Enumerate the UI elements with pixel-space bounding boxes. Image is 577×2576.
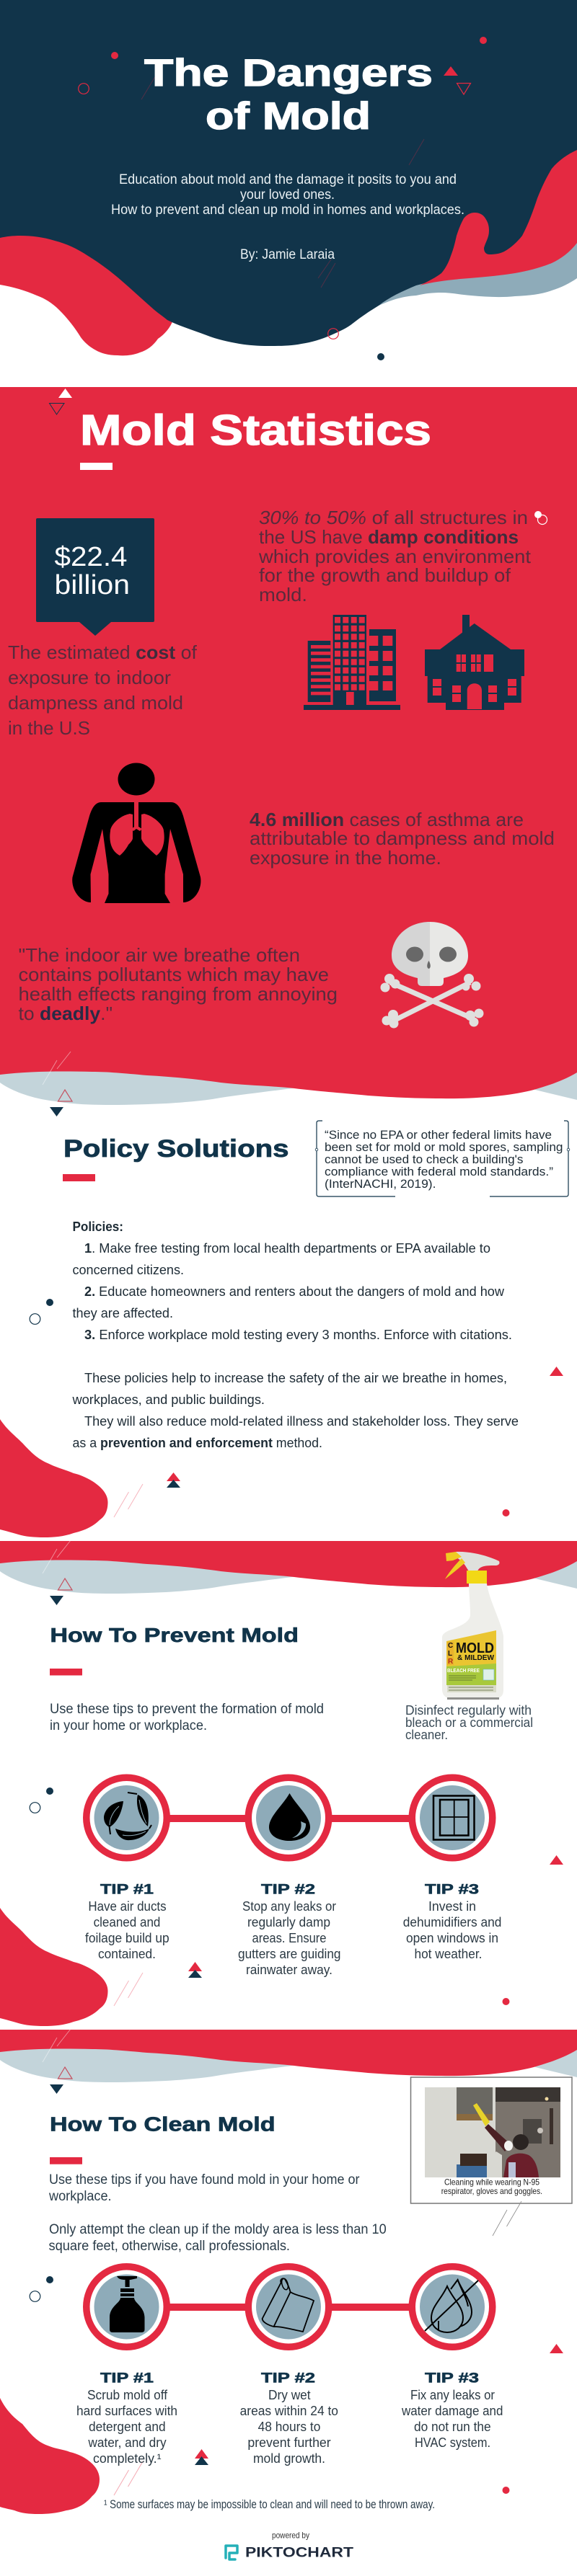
callout: $22.4 billion: $22.4 [55,542,127,572]
subtitle: your loved ones. [240,187,335,203]
heading bar [50,2157,82,2164]
text: policies: 3. Enforce workplace mold testing every 3 months. Enforce with citations. [84,1328,512,1342]
tip 1 text: Scrub mold off [87,2388,168,2402]
tip 3 text [403,1883,501,1961]
panel: how to prevent mold [0,1540,577,2026]
text: asthma: exposure in the home. [250,847,441,869]
text: policies: 2. Educate homeowners and renters about the dangers of mold and how [84,1284,505,1299]
image: photo of person cleaning mold: Cleaning while wearing N-95 [444,2177,539,2188]
tip 1 badge with soap [83,2263,170,2350]
text: intro [48,2172,387,2254]
tip 3 badge with window [408,1775,496,1861]
text: cost: exposure to indoor [8,667,171,688]
callout: quote box: been set for mold or mold spores, sampling [325,1140,563,1154]
tip 2 text: gutters are guiding [238,1947,340,1961]
text: quote: to deadly." [19,1003,113,1024]
tip 1 text: detergent and [89,2420,166,2434]
image: mold cleaner spray bottle: MOLD [456,1640,494,1656]
piktochart wordmark: PIKTOCHART [245,2546,353,2561]
decorative triangles [49,388,72,414]
subtitle: Education about mold and the damage it posits to you and [119,172,457,187]
text: quote: health effects ranging from annoying [19,983,338,1005]
image: photo of person cleaning mold: respirator, gloves and goggles. [441,2186,542,2196]
text: disinfect caption: Disinfect regularly with [405,1703,532,1718]
decorative shapes [30,1787,563,2006]
text: cost: in the U.S [8,717,90,739]
text: intro: Only attempt the clean up if the moldy area is less than 10 [49,2222,387,2237]
tip 1 text: TIP #1 [100,2371,154,2386]
heading: mold statistics: Mold Statistics [80,407,431,454]
title: The Dangers [144,52,433,94]
decorative marks [43,1052,72,1116]
text: policies [71,1220,519,1450]
panel: how to clean mold [0,2029,577,2514]
tip 1 text: water, and dry [87,2435,167,2450]
footnote: ¹ Some surfaces may be impossible to clean and will need to be thrown away. [104,2497,435,2511]
tip 1 text: foilage build up [85,1931,169,1945]
tip 3 text: water damage and [401,2404,503,2418]
text: disinfect caption [405,1703,533,1742]
decorative dot and ring [534,511,547,525]
heading bar [50,1669,82,1675]
image: mold cleaner spray bottle [442,1552,503,1700]
tips timeline [76,2263,503,2466]
tip 2 badge with towel [245,2263,332,2350]
subtitle: How to prevent and clean up mold in homes and workplaces. [111,203,464,218]
text: intro: Use these tips to prevent the formation of mold [50,1702,324,1717]
image: mold cleaner spray bottle: & MILDEW [457,1654,495,1662]
tip 1 text: completely.¹ [93,2451,162,2466]
tip 1 text: cleaned and [94,1915,160,1929]
text: damp conditions [258,507,532,605]
tip 3 text: TIP #3 [425,2371,479,2386]
text: cost: The estimated cost of [8,641,198,663]
tip 2 text [238,1883,340,1977]
tip 2 text: areas within 24 to [240,2404,338,2418]
heading: how to prevent mold: How To Prevent Mold [50,1624,299,1646]
tip 2 text: TIP #2 [261,1883,315,1897]
callout: quote box: “Since no EPA or other federal limits have [325,1128,552,1142]
text: intro: square feet, otherwise, call professionals. [49,2239,290,2254]
tip 2 text: 48 hours to [258,2420,320,2434]
image: mold cleaner spray bottle: C [448,1642,453,1650]
text: disinfect caption: bleach or a commercial [405,1715,533,1730]
tip 3 text [401,2371,503,2450]
wave: top band [0,2030,577,2082]
tip 2 badge with drop [245,1775,332,1861]
text: asthma: attributable to dampness and mold [250,827,555,849]
panel: policy solutions [0,1121,570,1537]
tip 3 text: open windows in [406,1931,498,1945]
decorative marks [43,1540,72,1605]
author: By: Jamie Laraia [240,247,335,262]
text: intro: Use these tips if you have found mold in your home or [49,2172,360,2188]
heading: policy solutions: Policy Solutions [63,1135,288,1163]
text: damp conditions: for the growth and buildup of [259,564,511,586]
blob: red left [0,2398,100,2514]
tip 1 text: contained. [98,1947,156,1961]
text: damp conditions: which provides an environment [258,546,532,567]
text: damp conditions: the US have damp conditions [259,526,519,548]
text: policies: 1. Make free testing from local health departments or EPA available to [84,1241,490,1256]
panel: header [0,0,577,360]
title [144,52,433,138]
tip 3 text: TIP #3 [425,1883,479,1897]
header blob: red left [0,231,173,355]
decorative marks [43,2029,72,2094]
tip 3 text: HVAC system. [415,2435,490,2450]
tip 3 text: dehumidifiers and [403,1915,501,1929]
tip 2 text: regularly damp [247,1915,330,1929]
text: policies: they are affected. [72,1306,173,1320]
tip 3 text: Fix any leaks or [410,2388,495,2402]
tip 1 text [76,2371,177,2466]
text: asthma: 4.6 million cases of asthma are [250,809,524,830]
subtitle [111,172,464,218]
tip 2 text: mold growth. [253,2451,325,2466]
tip 2 text: rainwater away. [246,1963,332,1977]
tip 2 text: areas. Ensure [252,1931,326,1945]
text: cost: dampness and mold [8,692,183,714]
heading bar [63,1174,95,1181]
tip 2 text: TIP #2 [261,2371,315,2386]
tip 2 text: Dry wet [268,2388,311,2402]
text: intro: in your home or workplace. [50,1718,207,1733]
heading bar [80,463,113,470]
image: mold cleaner spray bottle: BLEACH FREE [447,1669,480,1674]
text: damp conditions: 30% to 50% of all structures in [259,507,528,528]
text: policies: workplaces, and public buildings. [71,1393,265,1407]
tip 2 text: prevent further [247,2435,331,2450]
connector [166,1815,411,1822]
callout: $22.4 billion [36,518,154,636]
callout: $22.4 billion: billion [55,570,130,600]
tip 3 text: do not run the [414,2420,491,2434]
tip 2 text [240,2371,338,2466]
decorative shapes [30,1299,563,1517]
wave: stats bottom [0,1052,577,1105]
tip 2 text: Stop any leaks or [242,1899,336,1914]
callout: quote box: cannot be used to check a building's [325,1152,524,1166]
callout: quote box: compliance with federal mold standards.” [325,1165,553,1178]
footer: powered by piktochart [226,2531,353,2561]
panel: mold statistics [0,387,577,1116]
text: cost [8,641,198,739]
callout: quote box [315,1121,570,1196]
blob: red left [0,1908,108,2026]
text: intro: workplace. [48,2189,112,2204]
text: policies: These policies help to increase the safety of the air we breathe in homes, [84,1371,507,1385]
tip 3 badge with crossed-out drops [408,2263,496,2350]
tip 1 text: TIP #1 [100,1883,154,1897]
text: quote: contains pollutants which may have [19,964,329,985]
text: asthma [250,809,555,869]
tips timeline [83,1775,501,1977]
title: of Mold [206,95,371,138]
image: mold cleaner spray bottle: R [448,1658,454,1666]
text: disinfect caption: cleaner. [405,1728,448,1742]
header blob: red right [420,150,577,285]
text: policies: Policies: [72,1220,123,1234]
icon: house [425,615,524,710]
text: damp conditions: mold. [259,584,307,605]
text: intro [50,1702,324,1733]
icon: body with lungs [72,763,201,903]
tip 1 badge with leaves [83,1775,170,1861]
decorative shapes [79,37,487,360]
tip 1 text: hard surfaces with [76,2404,177,2418]
callout: quote box: (InterNACHI, 2019). [325,1177,436,1191]
header background: navy [0,0,577,346]
text: quote: "The indoor air we breathe often [19,944,300,966]
icon: piktochart logo [226,2546,237,2559]
blob: red left [0,1419,108,1537]
icon: skull and crossbones [381,922,483,1028]
text: policies: They will also reduce mold-related illness and stakeholder loss. They serve [84,1414,519,1429]
decorative shapes [30,2201,563,2494]
text: quote [19,944,338,1024]
heading: how to clean mold: How To Clean Mold [50,2113,276,2136]
powered by label: powered by [272,2531,309,2541]
header wave: grey [361,238,577,306]
tip 1 text: Have air ducts [88,1899,167,1914]
tip 3 text: hot weather. [414,1947,482,1961]
connector [166,2304,411,2311]
text: policies: concerned citizens. [72,1263,184,1277]
image: mold cleaner spray bottle: L [448,1650,452,1658]
image: photo of person cleaning mold [411,2077,572,2203]
faint strokes [114,2461,143,2495]
photo [425,2087,560,2177]
stats background [0,387,577,1061]
tip 1 text [85,1883,169,1961]
tip 3 text: Invest in [428,1899,476,1914]
wave: top band [0,1541,577,1594]
icon: office buildings [304,615,400,710]
text: policies: as a prevention and enforcement method. [72,1436,322,1450]
